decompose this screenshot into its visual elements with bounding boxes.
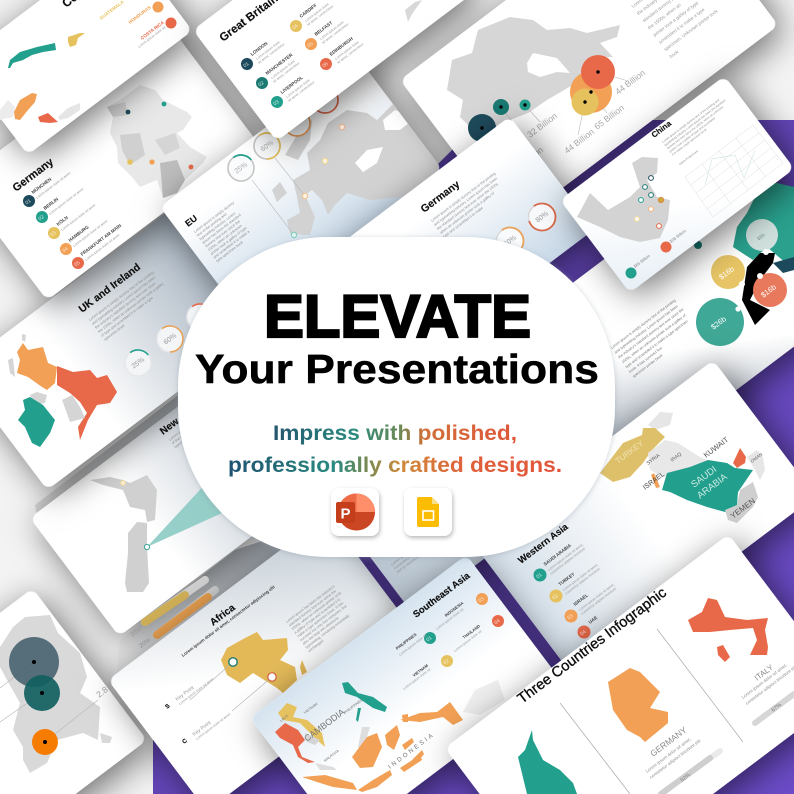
list: Lorem ipsum dolor sit amet — [35, 171, 71, 200]
text block: it to make a type specimen book — [671, 127, 708, 157]
key points: Key Point — [175, 685, 196, 703]
list: 03 — [566, 613, 575, 621]
map labels: CAMBODIA — [302, 707, 347, 744]
country labels: YEMEN — [729, 496, 757, 521]
text block — [631, 0, 724, 59]
map: Africa — [221, 632, 307, 693]
title: ELEVATE: ELEVATE — [264, 283, 531, 350]
list: KÖLN — [55, 214, 70, 227]
text block: Lorem ipsum has been the industry's — [285, 584, 336, 624]
italy progress bar — [755, 694, 794, 723]
bubble values: $26b — [709, 314, 728, 332]
text block: specimen book — [103, 324, 126, 342]
panel: Europe bubbles slide — [481, 150, 794, 499]
text block: unchanged — [307, 639, 324, 653]
map: China — [577, 157, 670, 242]
germany label: Lorem ipsum dolor sit amet, — [645, 736, 692, 774]
list: 03 — [272, 99, 281, 107]
list: HONDURAS — [128, 5, 152, 25]
panel: UK and Ireland slide — [0, 210, 260, 490]
text block: type specimen book — [215, 240, 244, 263]
list: consetetur adipisci tincidunt — [580, 587, 617, 616]
text block: survived not only five centuries, but — [299, 604, 347, 642]
map: Korea — [0, 615, 112, 773]
list: Lorem ipsum dolor sit — [398, 633, 427, 657]
values: 44 Billion — [613, 67, 647, 97]
key points: Key Point — [192, 720, 213, 738]
panel: Germany cities slide — [0, 24, 257, 300]
list: EDINBURGH — [329, 36, 354, 57]
map: Western Asia — [600, 412, 765, 523]
ring: 25% — [120, 345, 156, 381]
values — [511, 67, 647, 174]
ring: 60%: 60% — [163, 332, 178, 346]
list: Lorem ipsum dolor — [319, 20, 345, 41]
text block: the 1500s, when an — [647, 2, 682, 30]
key points: C — [182, 738, 189, 746]
subtitle: Your Presentations: Your Presentations — [195, 346, 599, 392]
panel: Korea slide — [0, 588, 147, 794]
text block: and scrambled it to make a — [213, 229, 251, 260]
callout wedge — [147, 425, 295, 547]
list: BELFAST — [314, 20, 333, 37]
text block: when an unknown printer took a galley of — [439, 191, 496, 235]
list: UAE — [588, 615, 598, 625]
gap shading: New Zealand and Africa — [115, 530, 295, 695]
text block: dummy text ever since the 1500s, when an unknown — [666, 105, 724, 150]
text block: of type and scrambled it to make a type — [100, 296, 154, 338]
text block: ipsum has been the standard — [201, 213, 242, 245]
bar values: 20% — [139, 637, 152, 650]
text block: the industry's standard dummy text ever since the — [617, 307, 685, 359]
values — [626, 228, 688, 278]
map: UK and Ireland — [8, 334, 117, 447]
list: Lorem ipsum dolor sit amet — [84, 233, 120, 262]
bubble values: $8b — [756, 232, 767, 242]
values: 44 Billion — [562, 126, 596, 156]
germany label: GERMANY — [648, 725, 689, 759]
text block: the industry's standard dummy text ever since — [94, 282, 156, 330]
map labels: VIETNAM — [303, 702, 318, 715]
purple backdrop — [153, 120, 794, 794]
text block — [168, 414, 209, 449]
text block: and typesetting industry. Lorem ipsum has been — [614, 304, 679, 355]
list: 04 — [61, 246, 70, 254]
text block: Lorem ipsum dummy text — [168, 414, 204, 442]
list: TURKEY — [558, 571, 576, 587]
heading: Germany — [11, 156, 57, 194]
ring: 80%: 80% — [535, 210, 550, 224]
text block: text of the printing and — [196, 212, 228, 237]
list: ISRAEL — [573, 593, 589, 607]
bubble values: $16b — [759, 282, 778, 300]
list — [23, 171, 123, 269]
values: 32 Billion — [525, 110, 559, 140]
text block: Sales Projections — [678, 149, 699, 166]
bubbles — [696, 219, 787, 346]
list: BERLIN — [43, 196, 60, 211]
panel: Central America slide — [0, 0, 192, 155]
text block: a galley of type and scrambled it to — [293, 597, 341, 635]
key points — [165, 677, 231, 746]
map labels: INDONESIA — [387, 731, 436, 771]
text block: specimen. Unknown printer took — [663, 8, 719, 52]
list: 02 — [442, 658, 451, 666]
text block: specimen printer book — [632, 353, 663, 379]
list: MÜNCHEN — [30, 175, 53, 195]
bubble values — [709, 232, 778, 332]
map: Germany — [608, 668, 668, 742]
text block — [610, 298, 699, 379]
text block — [430, 171, 508, 239]
label: 2.8 Billion — [94, 669, 130, 700]
text block: dummy text ever since the — [204, 219, 241, 248]
heading: UK and Ireland — [77, 261, 143, 315]
map: New Zealand — [90, 475, 157, 592]
list: sit amet, consectetur — [306, 4, 335, 27]
ring: 60% — [152, 321, 188, 357]
map: Southeast Asia — [275, 680, 505, 792]
list: sit amet, consectetur — [321, 22, 350, 45]
country labels: ARABIA — [695, 471, 730, 501]
ring: orange — [284, 110, 310, 136]
panel: Southeast Asia slide — [250, 555, 560, 794]
list: 04 — [291, 23, 300, 31]
map: Canada — [447, 17, 620, 130]
list: 04 — [493, 618, 502, 626]
heading: New Zealand — [158, 392, 214, 437]
panel: Three Countries Infographic slide — [445, 534, 794, 794]
list: PHILIPPINES — [395, 632, 418, 651]
progress bars — [145, 580, 215, 635]
italy value: 67% — [771, 702, 783, 714]
text block — [88, 270, 171, 342]
list — [395, 593, 504, 691]
list: CARDIFF — [299, 3, 318, 19]
list: 03 — [477, 596, 486, 604]
heading: Southeast Asia — [411, 570, 473, 620]
text block: Lorem ipsum is simply dummy text of the printing and — [661, 98, 720, 144]
text block: the standard dummy text ever since the 1500s — [436, 182, 499, 231]
text block: sed do eiusmod tempor — [396, 547, 430, 574]
text block: book — [669, 49, 680, 59]
list: VIETNAM — [412, 663, 430, 678]
map: Europe — [694, 183, 794, 325]
values: $65 Billion — [633, 253, 652, 269]
bubble values: $16b — [717, 264, 736, 282]
list: Lorem ipsum dolor — [285, 78, 311, 99]
text block: type and scrambled it to make a type specimen — [625, 319, 689, 369]
list: Lorem ipsum dolor — [304, 2, 330, 23]
text block: book. It has survived five — [628, 346, 663, 374]
gap shading: UK and New Zealand — [35, 340, 255, 530]
map: Germany — [107, 85, 207, 198]
list: Lorem ipsum dolor sit amet — [48, 187, 84, 216]
key points: Lorem ipsum dolor sit amet — [178, 677, 214, 706]
list: Lorem ipsum dolor sit — [137, 25, 166, 49]
list: Lorem ipsum dolor — [255, 40, 281, 61]
values: $38 Billion — [669, 228, 688, 244]
map labels: LAOS — [279, 713, 290, 723]
markers — [291, 124, 345, 238]
heading: China — [650, 119, 673, 140]
ring: red — [312, 87, 338, 113]
subheading: Lorem ipsum dolor sit amet, consectetur adipiscing elit — [181, 584, 276, 658]
list: 02 — [37, 214, 46, 222]
markers — [190, 658, 276, 711]
list: 02 — [257, 80, 266, 88]
ring: 50% — [491, 222, 529, 260]
germany value: 82% — [680, 772, 692, 784]
list: sit amet, consectetur — [336, 42, 365, 65]
country labels: ISRAEL — [642, 471, 666, 492]
country labels: SAUDI — [689, 464, 719, 490]
list: Lorem ipsum dolor sit — [453, 629, 482, 653]
markers — [120, 480, 150, 550]
ring: 25%: 25% — [131, 356, 146, 370]
text block: typesetting industry — [174, 427, 202, 449]
panel: Great Britain slide — [193, 0, 474, 141]
list: LONDON — [250, 40, 269, 57]
key points: Lorem ipsum dolor sit amet — [195, 712, 231, 741]
tagline line 2: professionally crafted designs. — [228, 454, 562, 477]
text block: of the printing and — [171, 424, 197, 445]
list — [534, 542, 617, 638]
text block: Lorem ipsum is simply dummy text of the printing — [430, 171, 496, 223]
list: 05 — [306, 41, 315, 49]
panel: Western Asia slide — [472, 360, 794, 678]
panel: EU slide — [160, 58, 445, 319]
italy label: Lorem ipsum dolor sit amet, — [741, 662, 788, 700]
heading: Germany — [419, 178, 462, 215]
italy label: ITALY — [753, 662, 776, 683]
heading: Africa — [208, 602, 238, 628]
text block: 1500s, when an unknown printer took a galley of — [621, 313, 687, 364]
icon: Google Slides — [404, 488, 452, 536]
panel: Africa slide — [108, 515, 426, 794]
list: COSTA RICA — [140, 20, 166, 41]
list: 06 — [321, 61, 330, 69]
list: Lorem ipsum dolor sit — [402, 667, 431, 691]
map: Great Britain — [518, 730, 577, 794]
text block — [285, 584, 359, 653]
text block: the 1500s, when an unknown printer took a galley — [97, 282, 165, 334]
list: FRANKFURT AM MAIN — [80, 223, 123, 257]
list: sit amet, consectetur — [257, 42, 286, 65]
key points: S — [165, 703, 171, 711]
list: THAILAND — [462, 623, 481, 640]
map labels: PHILIPPINES — [343, 698, 364, 715]
ring: 60% — [249, 128, 285, 164]
list — [99, 0, 176, 49]
list: Lorem ipsum dolor — [334, 40, 360, 61]
text block: scrambled it to make a type — [658, 7, 706, 45]
panel: hidden slide behind Southeast Asia — [340, 397, 572, 613]
list: 01 — [535, 572, 544, 580]
list: 01 — [24, 198, 33, 206]
heading: Three Countries Infographic — [515, 585, 670, 707]
list: sit amet, consectetur — [272, 61, 301, 84]
text block: and typesetting industry. Lorem ipsum has been — [91, 276, 156, 326]
text block: Lorem ipsum is simply dummy text of the printing — [88, 270, 154, 322]
central white panel — [178, 237, 615, 557]
list: consetetur adipisci tincidunt — [549, 547, 586, 576]
text block: printer took a galley of type and scrambled — [668, 116, 716, 153]
list: consetetur adipisci tincidunt — [564, 567, 601, 596]
germany label — [645, 725, 702, 780]
text block: printer took a galley of type — [652, 0, 700, 38]
country labels — [614, 435, 763, 521]
ring: 25%: 25% — [234, 161, 249, 175]
ring: 60%: 60% — [260, 139, 275, 153]
values: 14 Billion — [511, 144, 545, 174]
list: Lorem ipsum dolor sit amet, — [547, 543, 584, 572]
country labels: TURKEY — [614, 438, 646, 466]
ring: 50%: 50% — [503, 234, 518, 248]
list: Lorem ipsum dolor sit amet — [60, 203, 96, 232]
text block: 1500s, when an unknown printer took — [291, 591, 342, 631]
country labels: KUWAIT — [702, 435, 731, 460]
text block: standard dummy text ever since the — [288, 589, 337, 627]
markers — [635, 176, 664, 228]
list: Lorem ipsum dolor — [270, 59, 296, 80]
values: 65 Billion — [592, 102, 626, 132]
text block: printer took a galley of type — [210, 226, 248, 256]
text block: 1500s, when an unknown — [207, 224, 243, 252]
heading: EU — [183, 213, 199, 229]
germany label: consetetur adipisci tincidunt elit — [649, 738, 702, 780]
list — [241, 2, 365, 108]
list: Lorem ipsum dolor sit — [435, 607, 464, 631]
list: 05 — [73, 260, 82, 268]
ring: 80% — [523, 198, 561, 236]
heading: Western Asia — [516, 521, 571, 566]
list: MANCHESTER — [265, 52, 294, 76]
germany progress bar — [661, 751, 720, 794]
text block: typesetting industry. Lorem ipsum has been the standard — [664, 98, 726, 147]
text block: Lorem ipsum is simply dummy text of the printing — [610, 298, 676, 350]
list: sit amet, consectetur — [287, 80, 316, 103]
list: 01 — [242, 61, 251, 69]
list: 02 — [551, 593, 560, 601]
panel: Germany percentages slide — [310, 117, 595, 380]
map: Great Britain — [405, 0, 422, 22]
panel: New Zealand slide — [30, 360, 329, 650]
list: 01 — [425, 635, 434, 643]
icon: PowerPoint — [331, 488, 379, 536]
bar values — [130, 626, 152, 650]
line chart — [685, 125, 783, 217]
text block: Lorem ipsum dolor sit amet — [390, 537, 428, 567]
text block: Lorem ipsum is simply dummy — [193, 201, 235, 234]
text block: typesetting, remaining essentially — [305, 614, 350, 650]
list: 03 — [49, 230, 58, 238]
panel: Canada slide — [400, 0, 778, 227]
text block: and typesetting industry. Lorem ipsum has been — [433, 177, 498, 227]
bubbles — [468, 55, 615, 142]
country labels: IRAQ — [670, 451, 683, 464]
text block: consectetur adipiscing elit — [393, 542, 429, 570]
text block — [661, 95, 741, 166]
text block: also the leap into electronic — [302, 616, 340, 646]
list: HAMBURG — [68, 224, 90, 243]
list: Lorem ipsum dolor sit amet, — [562, 563, 599, 592]
map: Central America — [0, 33, 85, 123]
connector lines — [252, 158, 305, 235]
list: INDONESIA — [444, 600, 464, 618]
icon: PowerPoint: P — [340, 506, 351, 522]
bubbles — [0, 637, 98, 755]
panel: China slide — [560, 76, 794, 293]
text block — [193, 201, 257, 263]
tagline line 1: Impress with polished, — [273, 422, 517, 445]
connector lines — [501, 72, 628, 155]
text block: type and scrambled it to make — [442, 206, 484, 239]
list: Lorem ipsum dolor sit amet — [72, 219, 108, 248]
ring: partial — [182, 299, 218, 335]
list: Lorem ipsum dolor sit amet, — [578, 583, 615, 612]
country labels: OMAN — [750, 452, 763, 464]
country labels: SYRIA — [646, 452, 662, 467]
map labels — [279, 698, 436, 771]
list: SAUDI ARABIA — [543, 542, 573, 567]
ring: 25% — [223, 150, 259, 186]
text block: make a type specimen book. It has — [296, 601, 344, 638]
text block: typesetting industry. Lorem — [199, 211, 236, 241]
bar values: 20% — [130, 626, 143, 639]
map labels: MALAYSIA — [323, 749, 340, 763]
list: LIVERPOOL — [280, 75, 304, 95]
map: Italy — [688, 598, 768, 662]
list: 04 — [579, 629, 588, 637]
map: Europe — [272, 97, 445, 235]
